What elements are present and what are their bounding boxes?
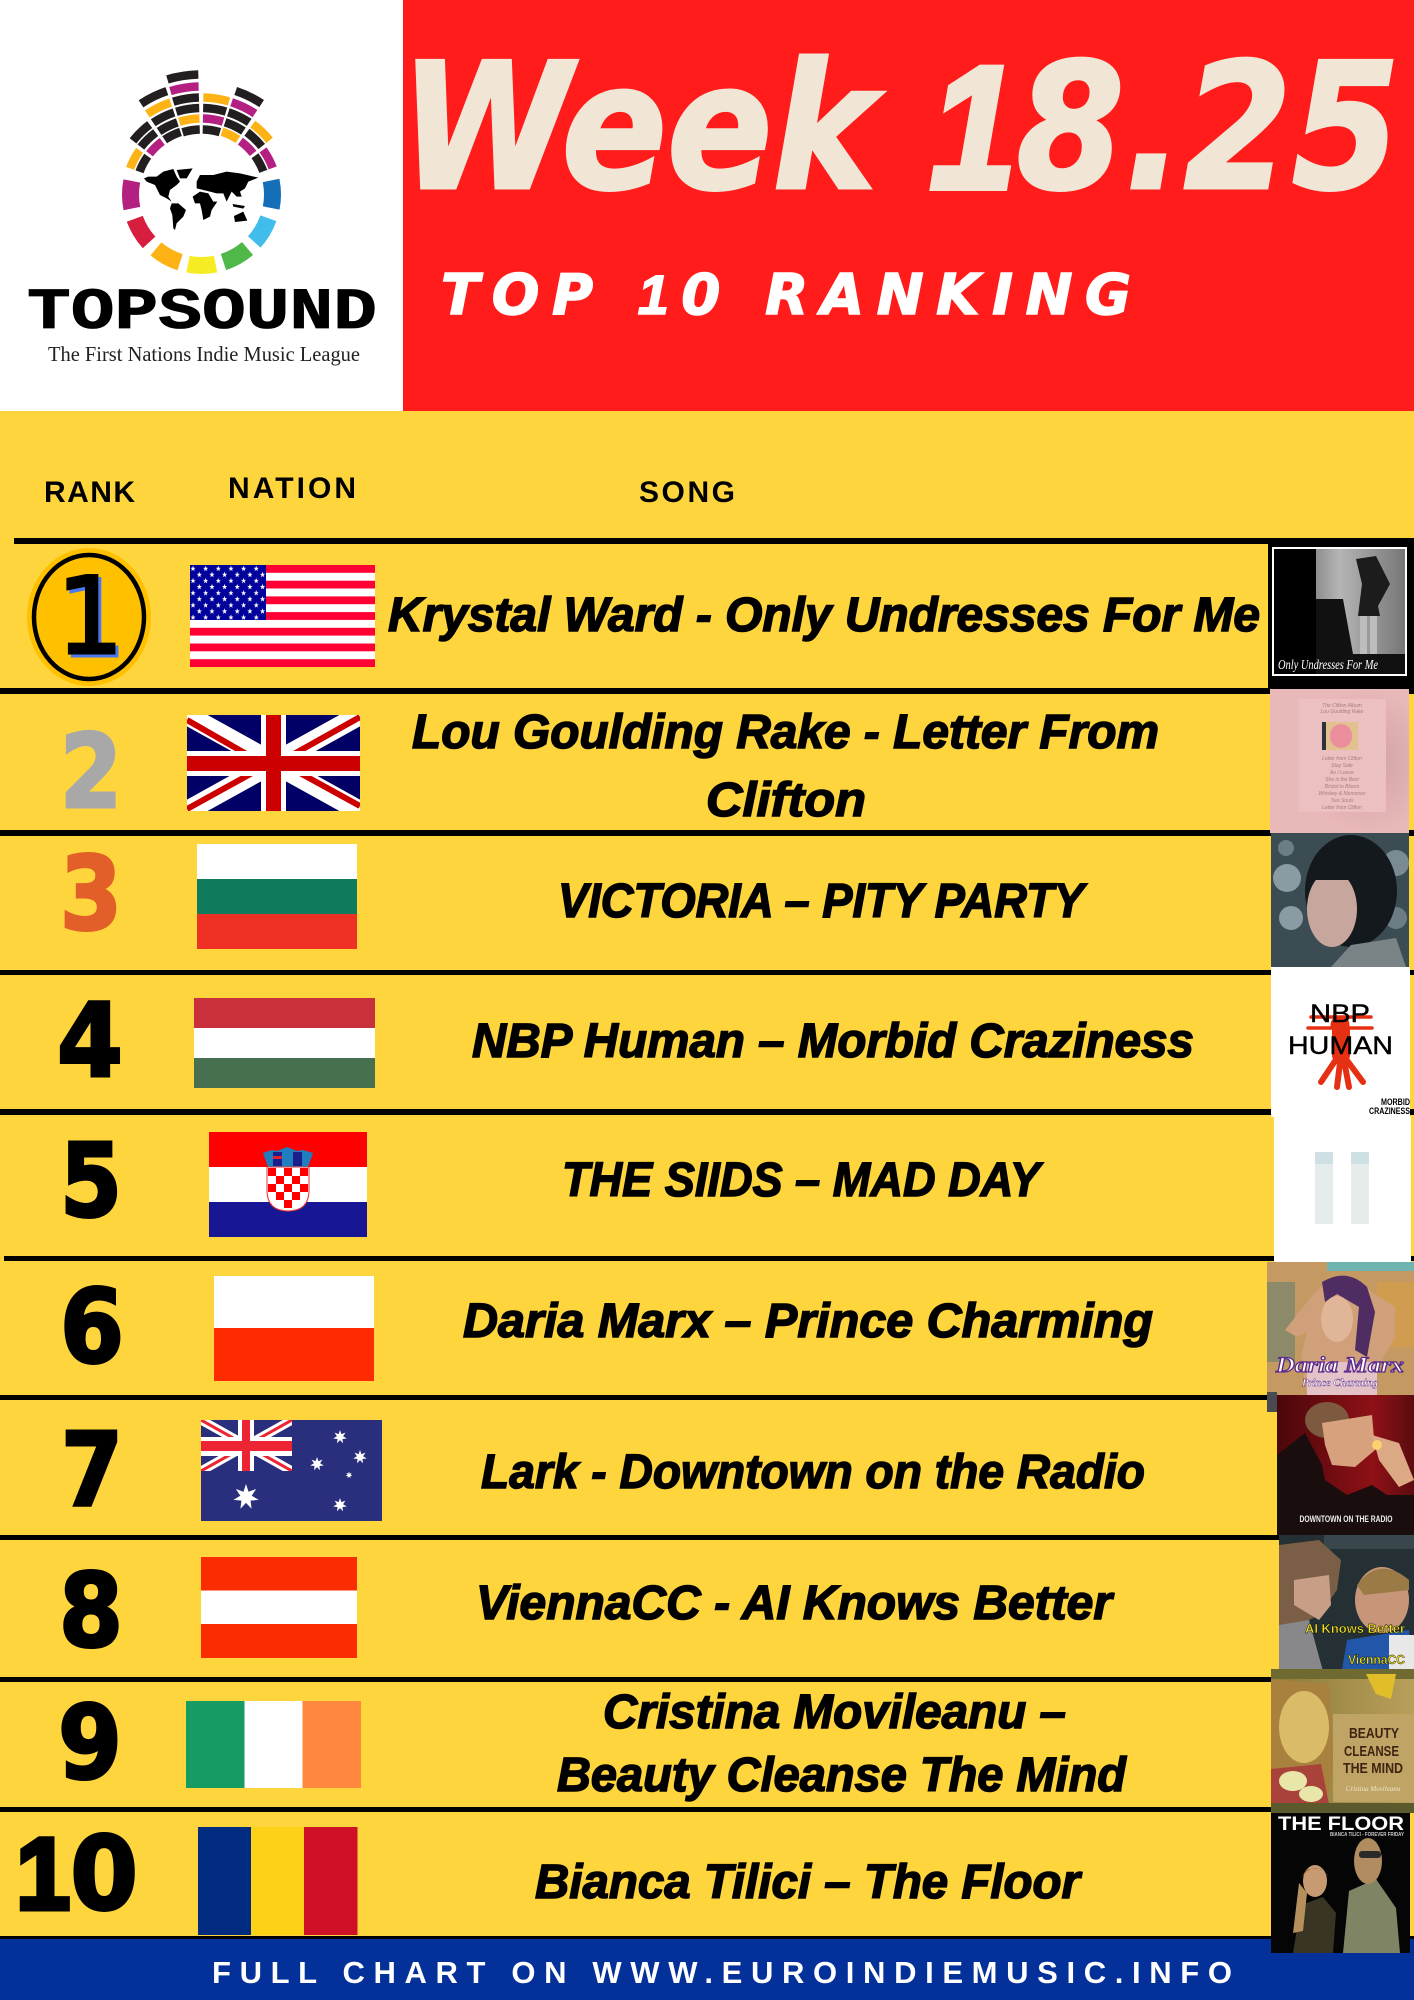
song 2 <box>412 706 1159 827</box>
row 1: rank badge: 1 <box>56 555 124 678</box>
song 7: Lark - Downtown on the Radio <box>481 1446 1145 1499</box>
row 1: rank badge: 1 <box>59 558 127 681</box>
cover 1 <box>1268 544 1414 688</box>
song 4: NBP Human – Morbid Craziness <box>472 1015 1194 1068</box>
cover 2: Letter from Clifton <box>1322 805 1362 811</box>
icon: topsound equalizer globe <box>50 43 353 346</box>
row 1: rank badge <box>27 548 151 686</box>
rank 10: 10 <box>16 1815 138 1934</box>
cover 2 <box>1270 689 1409 833</box>
cover 1: Only Undresses For Me <box>1278 658 1378 673</box>
flag: Croatia <box>209 1132 367 1237</box>
song 2: Clifton <box>706 774 866 827</box>
song 6: Daria Marx – Prince Charming <box>463 1295 1153 1348</box>
cover 2: Letter from Clifton <box>1322 756 1362 762</box>
song 5: THE SIIDS – MAD DAY <box>562 1154 1044 1207</box>
header: rank: RANK <box>44 476 135 509</box>
cover 10 <box>1271 1813 1410 1953</box>
subtitle: TOP 10 RANKING <box>441 263 1131 328</box>
cover 5 <box>1274 1117 1411 1262</box>
rank 2: 2 <box>60 713 122 832</box>
song 9 <box>557 1686 1128 1802</box>
cover 2: As I Leave <box>1329 770 1354 776</box>
cover 9 <box>1271 1669 1414 1813</box>
cover 6 <box>1267 1262 1414 1412</box>
rank 6: 6 <box>60 1268 124 1387</box>
cover 2: She is the Best <box>1325 777 1359 783</box>
flag: UK <box>187 715 360 811</box>
cover 4 <box>1271 967 1410 1117</box>
flag: Hungary <box>194 998 375 1088</box>
cover 8 <box>1279 1535 1414 1669</box>
flag: Bulgaria <box>197 844 357 949</box>
header: nation: NATION <box>228 472 356 505</box>
rank 4: 4 <box>57 982 123 1101</box>
footer text: FULL CHART ON WWW.EUROINDIEMUSIC.INFO <box>212 1955 1232 1990</box>
cover 9: BEAUTY <box>1349 1725 1399 1742</box>
logo wordmark: TOPSOUND <box>27 281 377 346</box>
rank 3: 3 <box>60 835 122 954</box>
song 3: VICTORIA – PITY PARTY <box>558 875 1088 928</box>
flag: USA <box>190 565 375 667</box>
cover 9: THE MIND <box>1343 1760 1403 1777</box>
cover 4: NBP <box>1310 1000 1370 1028</box>
song 2: Lou Goulding Rake - Letter From <box>412 706 1159 759</box>
cover 2: Whiskey & Memories <box>1319 791 1366 797</box>
flag: Ireland <box>186 1701 361 1788</box>
cover 2: The Clifton Album <box>1322 703 1362 709</box>
colour ring segments <box>101 94 302 295</box>
cover 7 <box>1277 1395 1414 1535</box>
cover 8: AI Knows Better <box>1305 1621 1405 1636</box>
cover 2: Two Souls <box>1331 798 1354 804</box>
cover 3 <box>1271 833 1409 967</box>
coat of arms <box>263 1147 313 1211</box>
cover 9: CLEANSE <box>1344 1743 1399 1760</box>
rank 5: 5 <box>60 1122 122 1241</box>
song 8: ViennaCC - AI Knows Better <box>476 1577 1114 1630</box>
logo tagline: The First Nations Indie Music League <box>48 342 360 366</box>
cover 4: HUMAN <box>1288 1032 1393 1060</box>
panel: title banner <box>400 0 1414 411</box>
cover 10: THE FLOOR <box>1278 1814 1404 1835</box>
header: song: SONG <box>639 476 735 509</box>
cover 6: Prince Charming <box>1302 1377 1378 1389</box>
rank 7: 7 <box>61 1411 123 1530</box>
cover 8: ViennaCC <box>1348 1652 1406 1667</box>
panel: logo <box>0 0 403 411</box>
equalizer bars <box>50 43 353 346</box>
rank 9: 9 <box>58 1684 122 1803</box>
rank 8: 8 <box>59 1552 123 1671</box>
row divider lines <box>0 538 1414 1812</box>
flag: Austria <box>201 1557 357 1658</box>
yellow chart background <box>0 411 1414 1941</box>
song 10: Bianca Tilici – The Floor <box>535 1856 1082 1909</box>
cover 2: Lou Goulding Rake <box>1321 709 1364 715</box>
world map <box>144 168 258 230</box>
flag: Australia <box>201 1420 382 1521</box>
cover 9: Cristina Movileanu <box>1346 1785 1401 1793</box>
footer bar <box>0 1936 1414 2000</box>
flag: Romania <box>198 1827 358 1935</box>
song 1: Krystal Ward - Only Undresses For Me <box>388 589 1260 642</box>
cover 6: Daria Marx <box>1275 1352 1404 1377</box>
song 9: Cristina Movileanu – <box>603 1686 1066 1739</box>
cover 2: Bristol in Bloom <box>1325 784 1359 790</box>
flag: Poland <box>214 1276 374 1381</box>
cover 2: Stay Safe <box>1331 763 1353 769</box>
song 9: Beauty Cleanse The Mind <box>557 1749 1128 1802</box>
column headers <box>44 472 735 509</box>
